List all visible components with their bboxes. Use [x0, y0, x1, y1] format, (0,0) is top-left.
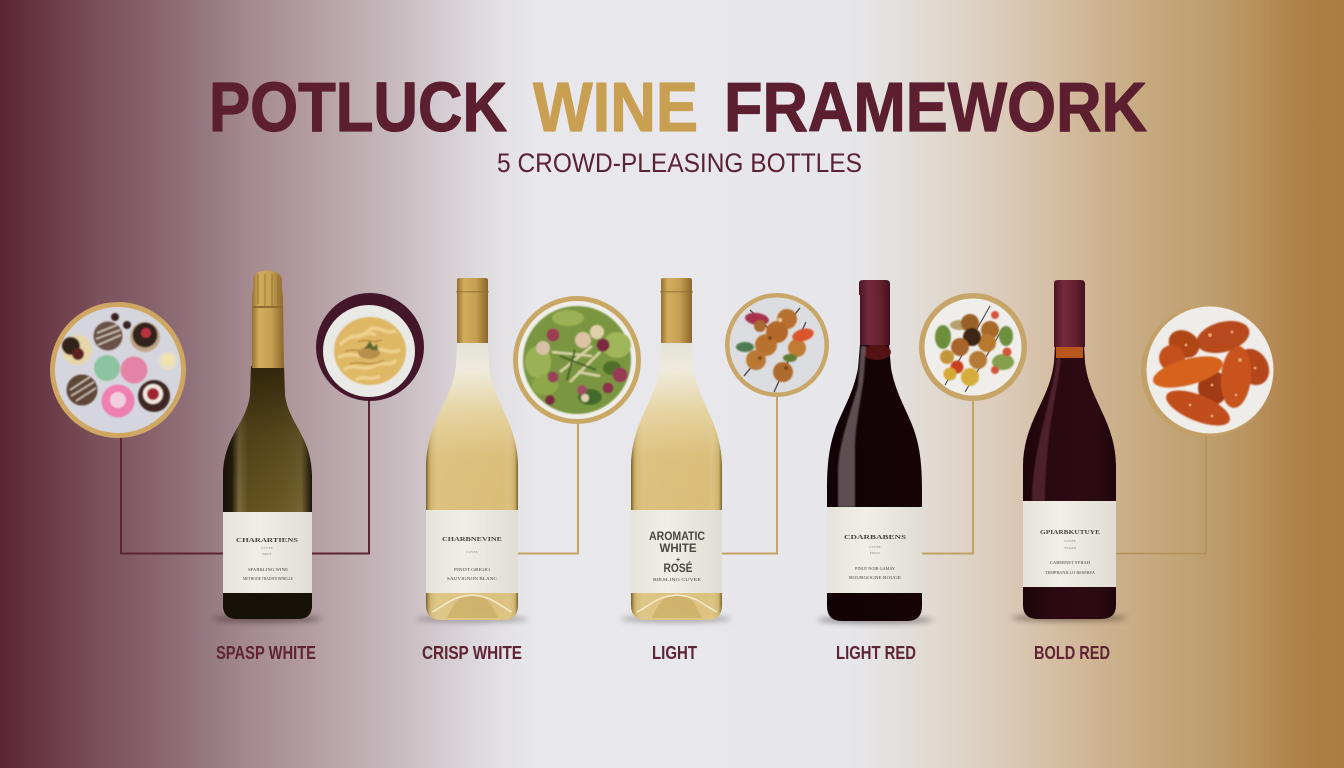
connector: skewers to aromatic	[720, 394, 777, 554]
icon: salad bowl	[513, 296, 641, 424]
bottle: light red: CUVEE	[869, 545, 881, 549]
bottle: aromatic white and rose: WHITE	[660, 541, 696, 555]
title: POTLUCK	[209, 68, 507, 146]
bottle: light red: PINOT	[870, 551, 881, 555]
connector: pasta to sparkling	[310, 400, 369, 554]
subtitle: 5 CROWD-PLEASING BOTTLES	[497, 148, 862, 178]
bottle: crisp white: CUVEE	[466, 550, 478, 554]
bottle: crisp white	[416, 278, 528, 622]
icon: pasta bowl	[316, 293, 424, 401]
bottle: aromatic white and rose: ROSÉ	[664, 560, 692, 575]
bottle: light red: BOURGOGNE ROUGE	[849, 575, 901, 580]
label: light: LIGHT	[652, 643, 697, 663]
bottle: light red: PINOT NOIR GAMAY	[855, 566, 896, 571]
title: FRAMEWORK	[724, 68, 1147, 146]
icon: buffalo wings plate	[1141, 305, 1275, 437]
bottle: sparkling white: SPARKLING WINE	[248, 567, 288, 572]
icon: skewers plate	[725, 293, 829, 397]
wing speckles	[1184, 330, 1256, 418]
connector: wings to bold red	[1114, 436, 1206, 554]
bottle: aromatic white and rose: +	[676, 557, 680, 564]
label: spasp white: SPASP WHITE	[216, 643, 316, 663]
bottle: bold red: CABERNET SYRAH	[1050, 560, 1091, 565]
bottle: aromatic white and rose	[620, 278, 732, 622]
label: crisp white: CRISP WHITE	[422, 643, 522, 663]
bottle: bold red: SYRAH	[1064, 546, 1076, 550]
bottle: sparkling white: CUVEE	[261, 546, 273, 550]
connector: desserts to sparkling	[121, 436, 226, 554]
bottle: light red: CDARBABENS	[844, 534, 907, 541]
bottle: sparkling white	[213, 270, 321, 622]
bottle: sparkling white: CHARARTIENS	[236, 537, 298, 544]
title	[209, 68, 1147, 146]
bottle: bold red	[1011, 280, 1127, 622]
bottle: aromatic white and rose: RIESLING CUVEE	[653, 577, 701, 582]
title: WINE	[533, 68, 698, 146]
icon: kebab plate	[919, 293, 1027, 401]
bottle: bold red: TEMPRANILLO RESERVA	[1045, 570, 1096, 575]
label: light red: LIGHT RED	[836, 643, 916, 663]
bottle: sparkling white: BRUT	[262, 552, 273, 556]
label: bold red: BOLD RED	[1034, 643, 1110, 663]
connector: kebab plate to light red	[920, 400, 973, 554]
bottle: sparkling white: METHODE TRADITIONNELLE	[243, 576, 293, 581]
bottle: crisp white: CHARBNEVINE	[442, 536, 502, 543]
bottle: bold red: CUVEE	[1064, 539, 1076, 543]
bottle: bold red: GPIARBKUTUYE	[1040, 529, 1100, 536]
bottle: crisp white: SAUVIGNON BLANC	[447, 576, 497, 581]
connector: salad to crisp white	[516, 422, 578, 554]
bottle: light red	[817, 280, 933, 624]
bottle: crisp white: PINOT GRIGIO	[454, 567, 491, 572]
icon: desserts plate	[50, 302, 186, 438]
bottle: aromatic white and rose: AROMATIC	[649, 529, 705, 543]
